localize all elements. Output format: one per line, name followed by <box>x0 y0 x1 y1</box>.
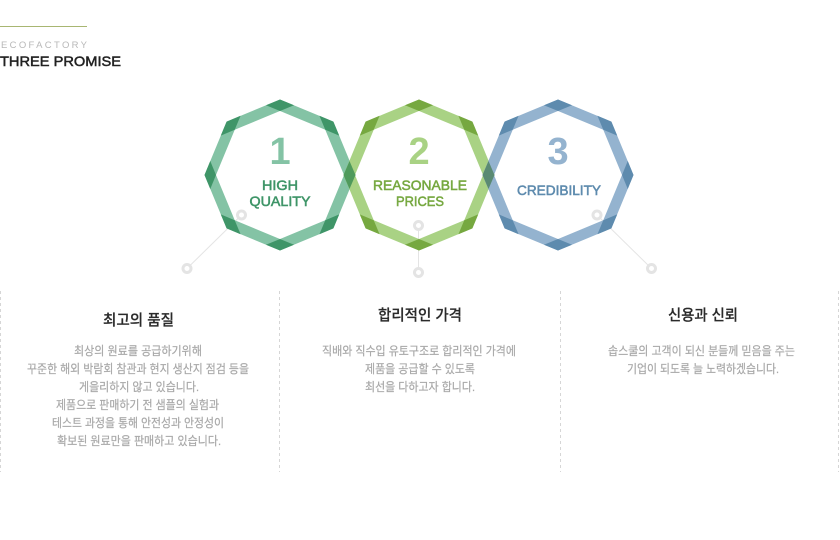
overlap: octagons 1 and 2 <box>344 161 356 189</box>
column 2: reasonable price: 직배와 직수입 유토구조로 합리적인 가격에 <box>322 344 516 358</box>
column 2: reasonable price: 제품을 공급할 수 있도록 <box>365 362 475 376</box>
column 3: credit and trust: 기업이 되도록 늘 노력하겠습니다. <box>627 362 779 376</box>
column 2: reasonable price: 최선을 다하고자 합니다. <box>365 380 475 394</box>
octagon 2: reasonable prices: PRICES <box>396 193 444 209</box>
octagon 1: high quality: HIGH <box>262 177 298 193</box>
column 3: credit and trust: 솝스쿨의 고객이 되신 분들께 믿음을 주는 <box>608 344 795 358</box>
connector: credibility pin <box>593 211 656 272</box>
octagon 3: credibility <box>488 100 634 250</box>
column 3: credit and trust: 신용과 신뢰 <box>668 307 738 324</box>
octagon 1: high quality: QUALITY <box>250 193 311 209</box>
heading: three promise: THREE PROMISE <box>0 53 121 69</box>
column 2: reasonable price: 합리적인 가격 <box>378 307 462 324</box>
octagon 1: high quality: 1 <box>269 131 291 173</box>
column 1: best quality <box>27 312 249 448</box>
column 1: best quality: 제품으로 판매하기 전 샘플의 실험과 <box>56 398 219 412</box>
heading: three promise <box>0 26 121 69</box>
octagon 3: credibility: CREDIBILITY <box>517 182 602 198</box>
column 1: best quality: 테스트 과정을 통해 안전성과 안정성이 <box>52 416 224 430</box>
column 1: best quality: 꾸준한 해외 박람회 참관과 현지 생산지 점검 등을 <box>27 362 249 376</box>
overlap: octagons 2 and 3 <box>482 161 494 189</box>
column 1: best quality: 최상의 원료를 공급하기위해 <box>74 344 202 358</box>
connector: price pin <box>414 222 422 276</box>
octagon 2: reasonable prices: REASONABLE <box>373 177 467 193</box>
octagon 1: high quality <box>204 100 356 250</box>
octagon 2: reasonable prices: 2 <box>408 131 430 173</box>
column 1: best quality: 확보된 원료만을 판매하고 있습니다. <box>57 434 221 448</box>
column 1: best quality: 최고의 품질 <box>103 312 174 329</box>
column 3: credit and trust <box>608 307 795 376</box>
column 1: best quality: 게을리하지 않고 있습니다. <box>79 380 199 394</box>
column 2: reasonable price <box>322 307 516 394</box>
octagon 3: credibility: 3 <box>547 131 569 173</box>
heading: three promise: ECOFACTORY <box>1 40 88 51</box>
octagon 2: reasonable prices <box>349 100 494 250</box>
connector: quality pin <box>183 211 246 272</box>
